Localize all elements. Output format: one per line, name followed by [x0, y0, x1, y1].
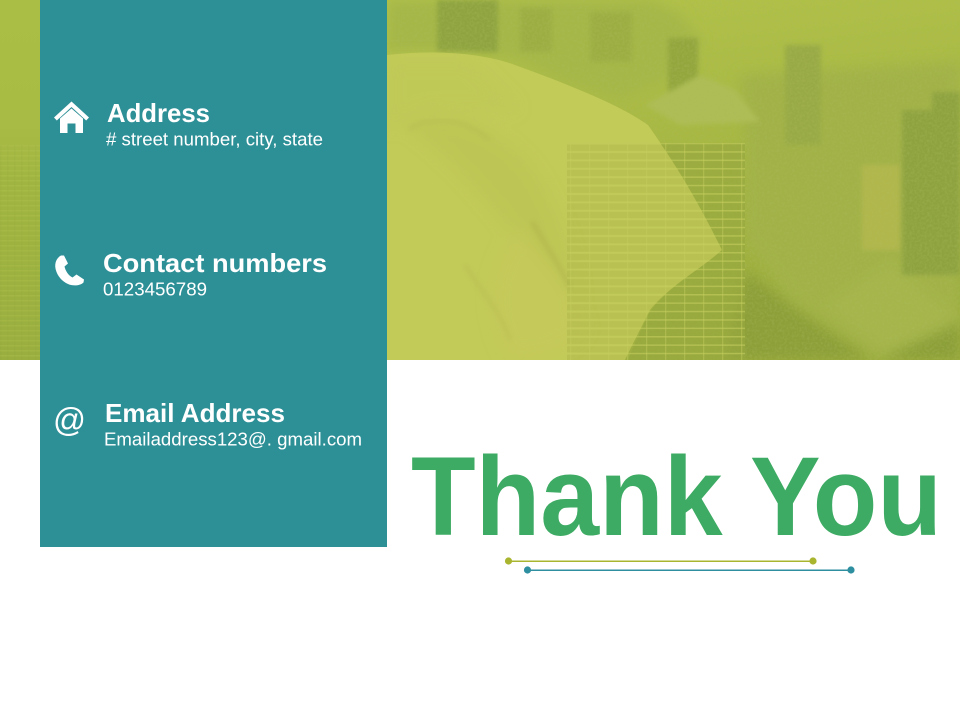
- panel: contact details: [40, 0, 387, 547]
- title: Thank You: Thank You: [411, 434, 942, 559]
- icon: phone: [55, 256, 84, 285]
- contact item: address: [54, 98, 323, 150]
- hand: [387, 52, 722, 360]
- contact item: phone: [55, 248, 327, 300]
- text: phone number: 0123456789: [103, 280, 207, 300]
- divider: teal line with dots: [524, 566, 855, 574]
- text: street: # street number, city, state: [106, 130, 323, 150]
- building grid overlay: [567, 143, 745, 360]
- icon: house: [54, 102, 89, 133]
- contact item: email: [53, 398, 362, 450]
- divider: olive line with dots: [505, 557, 817, 565]
- heading: email address: Email Address: [105, 398, 285, 428]
- heading: contact numbers: Contact numbers: [103, 248, 327, 278]
- photo banner: hand and city skyline with green tint: [0, 0, 960, 360]
- heading: address: Address: [107, 98, 210, 128]
- text: email: Emailaddress123@. gmail.com: [104, 430, 362, 450]
- icon: at sign: @: [53, 401, 86, 438]
